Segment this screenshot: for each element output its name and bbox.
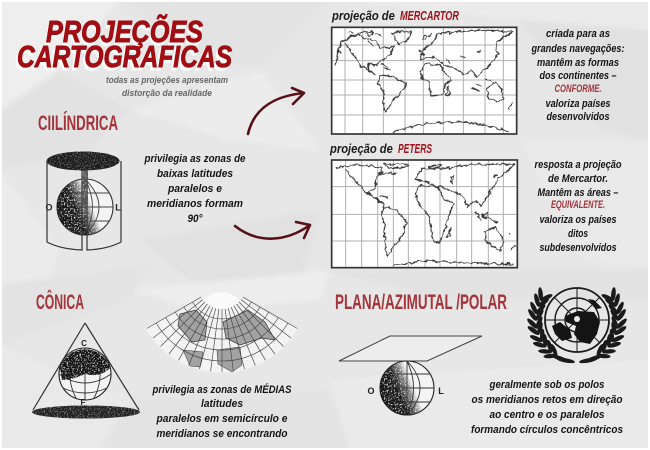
title: PROJEÇÕES xyxy=(46,13,203,49)
subtitle: todas as projeções apresentam xyxy=(106,75,228,86)
heading: mercator: projeção de xyxy=(331,8,398,23)
map: mercator xyxy=(332,27,517,134)
text: cilíndrica xyxy=(144,153,246,225)
icon: cone with globe xyxy=(32,323,140,418)
icon: plane with globe: O xyxy=(367,386,375,396)
text: peters: de Mercartor. xyxy=(548,173,608,185)
text: plana: ao centro e os paralelos xyxy=(490,409,604,421)
text: cilíndrica: baixas latitudes xyxy=(157,168,233,180)
title xyxy=(15,13,232,77)
text: peters: valoriza os países xyxy=(540,214,616,226)
text: cilíndrica: privilegia as zonas de xyxy=(144,153,246,165)
text: plana: geralmente sob os polos xyxy=(489,379,604,391)
text: cilíndrica: meridianos formam xyxy=(147,198,243,210)
text: peters: ditos xyxy=(568,228,588,240)
text: cônica xyxy=(152,383,292,440)
icon: UN emblem xyxy=(520,285,634,364)
icon: cylinder with globe xyxy=(45,152,121,250)
text: peters: resposta a projeção xyxy=(534,159,622,171)
heading: cônica: CÔNICA xyxy=(36,290,84,314)
text: mercator: dos continentes – xyxy=(540,70,616,82)
subtitle xyxy=(106,75,228,99)
icon: cone with globe: C xyxy=(81,339,87,348)
text: peters: EQUIVALENTE. xyxy=(551,199,605,211)
title: CARTOGRAFICAS xyxy=(15,42,230,77)
text: cônica: paralelos em semicírculo e xyxy=(156,413,288,425)
text: plana: formando círculos concêntricos xyxy=(471,424,623,436)
subtitle: distorção da realidade xyxy=(122,88,213,99)
heading: cilíndrica: CIILÍNDRICA xyxy=(38,112,118,135)
text: cônica: latitudes xyxy=(201,398,243,410)
icon: cone with globe: F xyxy=(81,398,86,407)
text: mercator: CONFORME. xyxy=(554,83,602,95)
heading: mercator: MERCARTOR xyxy=(400,8,459,23)
map: conic projection xyxy=(145,292,298,373)
text: plana: os meridianos retos em direção xyxy=(472,394,623,406)
text: cônica: meridianos se encontrando xyxy=(156,428,288,440)
text: plana xyxy=(471,379,623,436)
title: CARTOGRAFICAS xyxy=(17,39,232,74)
text: cilíndrica: paralelos e xyxy=(167,183,222,195)
text: peters xyxy=(534,159,622,254)
text: peters: Mantêm as áreas – xyxy=(538,187,618,199)
text: cônica: privilegia as zonas de MÉDIAS xyxy=(152,383,292,396)
text: cilíndrica: 90° xyxy=(188,213,203,225)
text: mercator: grandes navegações: xyxy=(531,43,625,55)
text: mercator xyxy=(531,28,625,123)
text: mercator: mantêm as formas xyxy=(537,57,619,69)
text: mercator: desenvolvidos xyxy=(546,111,610,123)
heading: peters: projeção de xyxy=(329,141,396,156)
map: peters xyxy=(332,160,517,268)
heading: plana azimutal polar: PLANA/AZIMUTAL /POLAR xyxy=(335,291,507,314)
text: mercator: valoriza países xyxy=(546,98,610,110)
icon: plane with globe xyxy=(339,336,482,415)
arrow: to peters xyxy=(235,222,310,239)
text: mercator: criada para as xyxy=(546,28,610,40)
title: PROJEÇÕES xyxy=(45,16,202,52)
arrow: to mercator xyxy=(248,88,304,134)
text: peters: subdesenvolvidos xyxy=(540,242,616,254)
icon: plane with globe: L xyxy=(438,386,444,396)
heading: peters: PETERS xyxy=(398,141,432,156)
icon: cylinder with globe: O xyxy=(45,202,53,212)
icon: cylinder with globe: L xyxy=(115,202,121,212)
